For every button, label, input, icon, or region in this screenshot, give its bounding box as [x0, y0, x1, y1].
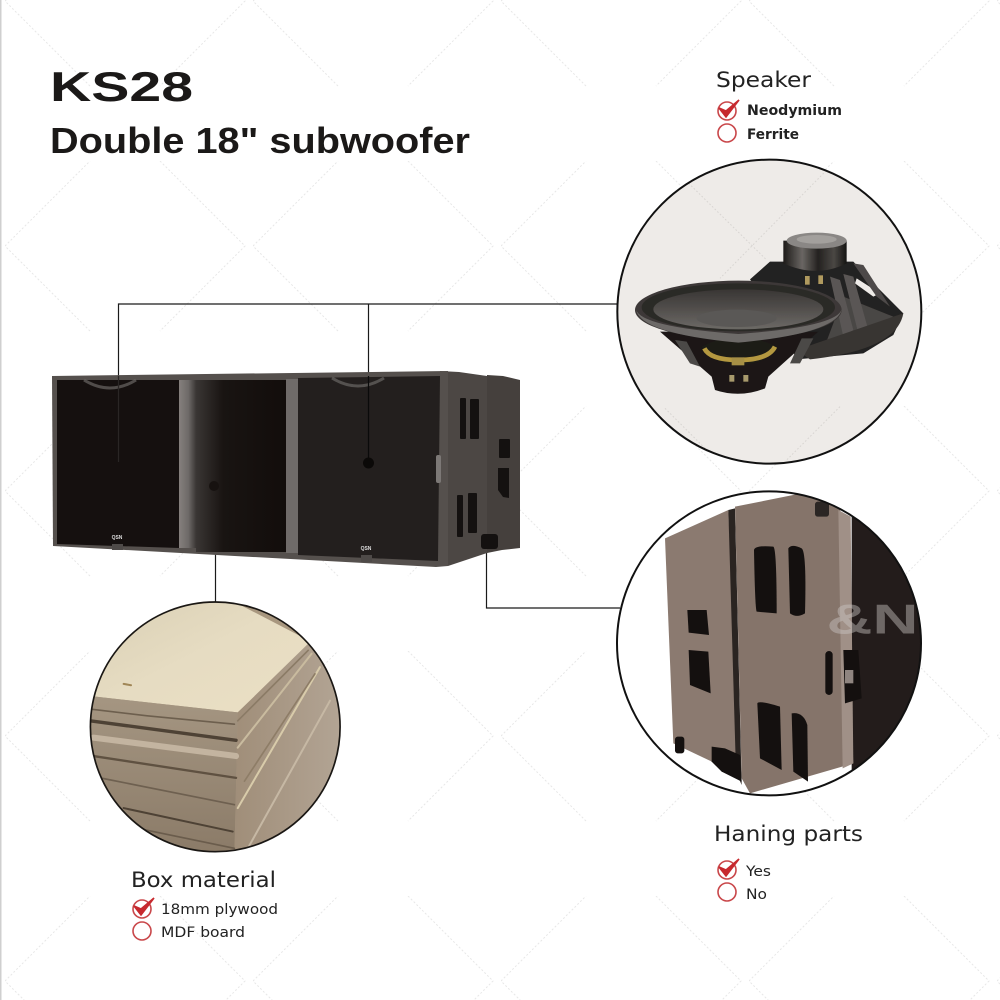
grille tabs: [112, 544, 372, 562]
hanging parts options: [714, 822, 863, 903]
left grille: [57, 380, 179, 548]
speaker options: Speaker: [716, 68, 811, 92]
watermark arcs: [84, 378, 384, 388]
centre seam: [728, 508, 742, 785]
main panel: [735, 492, 853, 793]
plywood front edge: [87, 696, 238, 858]
plywood side face: [234, 644, 345, 858]
hanging parts options: No: [746, 887, 767, 903]
hanging parts options: Haning parts: [714, 822, 863, 846]
latch highlight: [845, 670, 853, 683]
logo left: QSN: [112, 535, 123, 541]
hanging parts options: Yes: [745, 864, 771, 880]
edge strip: [838, 510, 853, 768]
plywood detail circle: [87, 597, 345, 858]
speaker options: Ferrite: [747, 127, 799, 143]
left panel: [665, 510, 736, 762]
leader lines over cabinet: [118, 376, 374, 491]
cabinet side section: [436, 371, 487, 566]
circle outline: [617, 491, 921, 795]
speaker options: [716, 68, 842, 143]
circle outline: [617, 160, 921, 464]
box material options: 18mm plywood: [161, 902, 278, 918]
right dark grille area: [852, 516, 920, 770]
front driver: [635, 281, 842, 394]
logo right: QSN: [361, 546, 372, 552]
watermark: &N: [827, 595, 918, 642]
rear driver: [750, 233, 903, 359]
cabinet latch: [436, 455, 441, 483]
cabinet back section: [487, 375, 520, 553]
speaker detail circle: [617, 160, 921, 467]
handle cut-outs: [675, 502, 862, 782]
box material options: [131, 868, 278, 941]
title: [50, 63, 470, 161]
cabinet front frame: [52, 371, 448, 567]
speaker options: Neodymium: [747, 103, 842, 119]
plywood top face: [95, 602, 308, 712]
box material options: MDF board: [161, 925, 245, 941]
handles on side: [457, 398, 510, 549]
title: KS28: [50, 63, 193, 110]
subwoofer cabinet: [52, 371, 520, 567]
background lattice: [665, 160, 840, 467]
circle outline: [90, 602, 340, 852]
title: Double 18" subwoofer: [50, 120, 470, 161]
box material options: Box material: [131, 868, 276, 892]
right grille: [298, 376, 440, 561]
hanging parts detail circle: [617, 491, 930, 805]
plywood layers: [90, 650, 330, 848]
horn opening: [179, 379, 298, 553]
leader lines: [118, 304, 620, 608]
